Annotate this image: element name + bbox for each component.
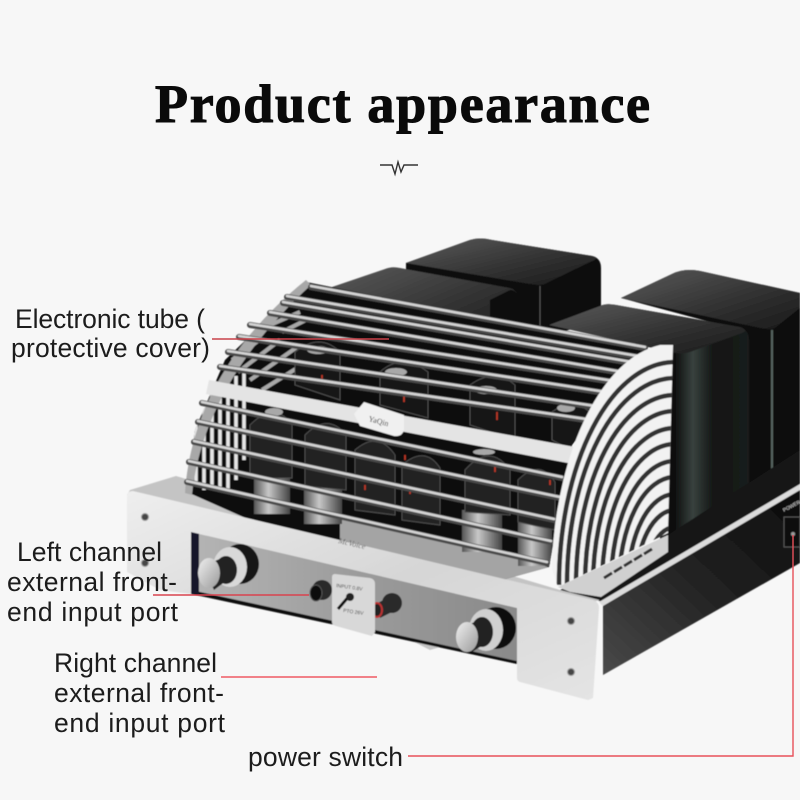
label: left channel input	[7, 537, 179, 627]
cage badge: YaQin	[367, 414, 390, 428]
label: electronic tube	[11, 304, 210, 363]
cage rods	[187, 287, 645, 563]
left volume knob	[198, 544, 259, 590]
label: right channel input: end input port	[54, 708, 226, 738]
transformer: back left	[406, 238, 601, 345]
cage interior with vacuum tubes	[192, 282, 644, 580]
power switch	[782, 499, 800, 547]
cage silver band	[206, 380, 575, 464]
front panel recess	[191, 532, 517, 664]
transformer: front left	[332, 267, 518, 345]
transformer: back right	[621, 270, 800, 520]
panel screws	[142, 514, 574, 676]
chassis side panel	[603, 490, 800, 675]
vent holes	[604, 549, 652, 578]
label: electronic tube: protective cover)	[11, 333, 210, 363]
label: left channel input: external front-	[7, 567, 177, 597]
chassis side top edge	[599, 484, 800, 606]
left RCA input	[310, 580, 332, 601]
cage badge	[354, 402, 404, 436]
leader: electronic tube	[212, 338, 389, 340]
tube bases	[254, 478, 552, 566]
input selector block	[332, 574, 375, 636]
tube highlights and filaments	[265, 346, 575, 455]
cage rod highlights	[187, 286, 645, 562]
cage left arc rim	[185, 280, 311, 495]
leader: power switch	[408, 535, 793, 756]
chassis silver deck	[127, 476, 600, 650]
label: power switch: power switch	[248, 742, 403, 772]
amplifier product image	[127, 238, 800, 700]
deck under tubes	[339, 519, 549, 593]
far plate slots	[196, 312, 310, 490]
input selector block: PTO 26V	[343, 608, 364, 617]
right RCA input	[372, 593, 402, 618]
deck model text: McVoice	[337, 536, 367, 551]
leader: left channel input	[153, 594, 309, 596]
silver front panel	[127, 491, 599, 700]
leader: right channel input	[221, 676, 377, 678]
vented deck strip	[558, 535, 668, 597]
title: Product appearance	[155, 74, 650, 134]
label: right channel input: Right channel	[54, 648, 217, 678]
tube glass envelopes	[250, 342, 590, 530]
label: left channel input: Left channel	[17, 537, 162, 567]
recess lower shadow	[191, 590, 517, 664]
right volume knob	[456, 607, 516, 652]
blue indicator	[191, 532, 199, 594]
label: electronic tube: Electronic tube (	[15, 304, 205, 334]
transformer: front right	[549, 304, 749, 560]
curved slots	[559, 362, 675, 585]
chassis top	[560, 450, 800, 602]
label: left channel input: end input port	[7, 597, 179, 627]
icon: waveform divider	[380, 162, 418, 174]
label: right channel input	[54, 648, 226, 738]
label: right channel input: external front-	[54, 678, 224, 708]
right end plate with curved slots	[551, 344, 674, 586]
input selector block: INPUT 0.8V	[336, 583, 364, 593]
